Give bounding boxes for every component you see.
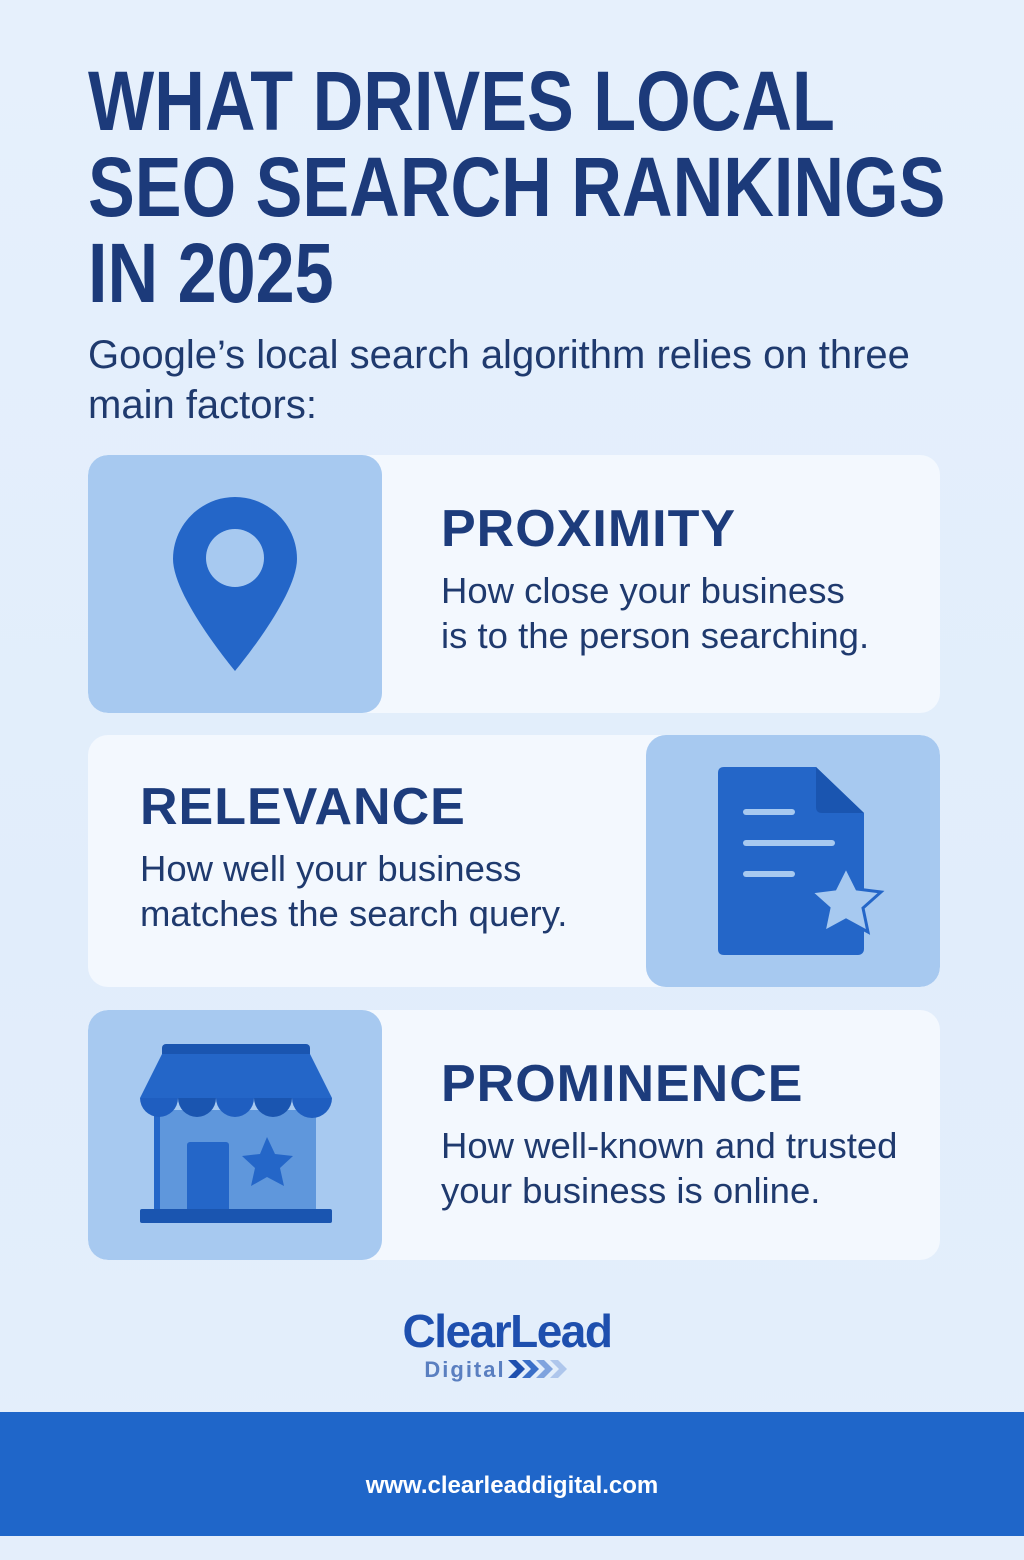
text: relevance: RELEVANCE [140, 778, 466, 836]
text: proximity [441, 500, 869, 656]
text: relevance: matches the search query. [140, 893, 567, 934]
footer bar with url: www.clearleaddigital.com [366, 1472, 658, 1499]
footer bar with url [0, 1412, 1024, 1536]
text: prominence: your business is online. [441, 1170, 820, 1211]
text: relevance: How well your business [140, 848, 521, 889]
panel: proximity [88, 455, 940, 713]
subtitle [88, 333, 910, 427]
text: prominence: PROMINENCE [441, 1055, 803, 1113]
subtitle: main factors: [88, 383, 317, 427]
icon: storefront [88, 1010, 382, 1260]
text: prominence [441, 1055, 897, 1211]
text: proximity: is to the person searching. [441, 615, 869, 656]
panel: relevance [88, 735, 940, 987]
logo: Digital [424, 1357, 506, 1382]
logo [403, 1305, 611, 1382]
title: SEO SEARCH RANKINGS [88, 140, 945, 234]
text: prominence: How well-known and trusted [441, 1125, 897, 1166]
icon: location pin [88, 455, 382, 713]
title [88, 54, 945, 320]
panel: prominence [88, 1010, 940, 1260]
title: WHAT DRIVES LOCAL [88, 54, 835, 148]
text: proximity: How close your business [441, 570, 845, 611]
title: IN 2025 [88, 226, 334, 320]
logo: ClearLead [403, 1305, 611, 1357]
text: relevance [140, 778, 567, 934]
text: proximity: PROXIMITY [441, 500, 736, 558]
subtitle: Google’s local search algorithm relies on three [88, 333, 910, 377]
icon: document with star [646, 735, 940, 987]
